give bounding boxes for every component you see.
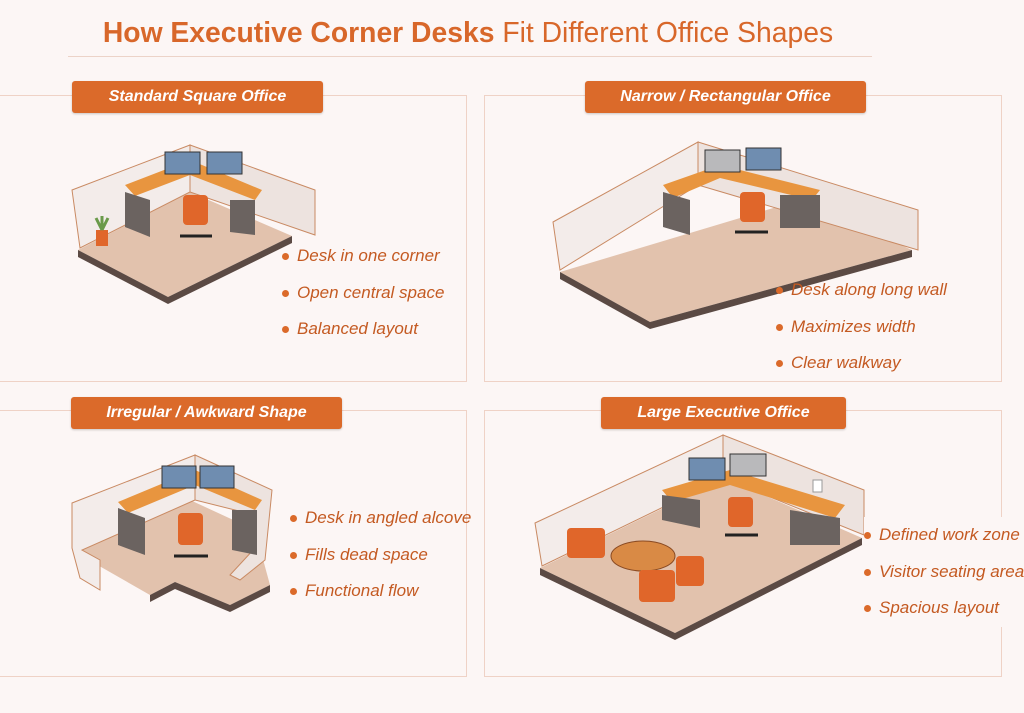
bullets: narrow: Desk along long wall	[791, 280, 947, 299]
label: standard square: Standard Square Office	[109, 88, 286, 105]
bullets: irregular: Functional flow	[305, 581, 418, 600]
bullets: narrow: Clear walkway	[791, 353, 901, 372]
bullets: narrow	[776, 280, 948, 372]
room: large	[535, 435, 864, 640]
bullets: square	[282, 246, 444, 338]
title underline	[68, 56, 872, 57]
panel: narrow	[484, 95, 1002, 382]
bullets: irregular	[290, 508, 471, 600]
title: How Executive Corner Desks Fit Different Office Shapes	[103, 16, 833, 48]
bullets: large: Defined work zone	[879, 525, 1020, 544]
label: large	[601, 397, 846, 429]
room: narrow	[553, 142, 918, 329]
label: narrow	[585, 81, 866, 113]
bullets: square: Open central space	[297, 282, 444, 302]
bullets: narrow: Maximizes width	[791, 316, 916, 336]
bullets: large	[864, 517, 1024, 626]
label: narrow: Narrow / Rectangular Office	[620, 88, 831, 105]
label: irregular	[71, 397, 342, 429]
room: irregular	[72, 455, 272, 612]
label: standard square	[72, 81, 323, 113]
panel: large	[484, 410, 1002, 677]
label: large: Large Executive Office	[637, 404, 810, 421]
panel: irregular	[0, 410, 467, 677]
bullets: large: Visitor seating area	[879, 562, 1024, 580]
bullets: large: Spacious layout	[879, 598, 999, 617]
bullets: irregular: Desk in angled alcove	[305, 508, 471, 527]
bullets: square: Balanced layout	[297, 319, 418, 338]
room: square	[72, 145, 315, 304]
bullets: square: Desk in one corner	[297, 246, 440, 265]
label: irregular: Irregular / Awkward Shape	[106, 404, 307, 421]
panel: standard square	[0, 95, 467, 382]
bullets: irregular: Fills dead space	[305, 544, 428, 564]
